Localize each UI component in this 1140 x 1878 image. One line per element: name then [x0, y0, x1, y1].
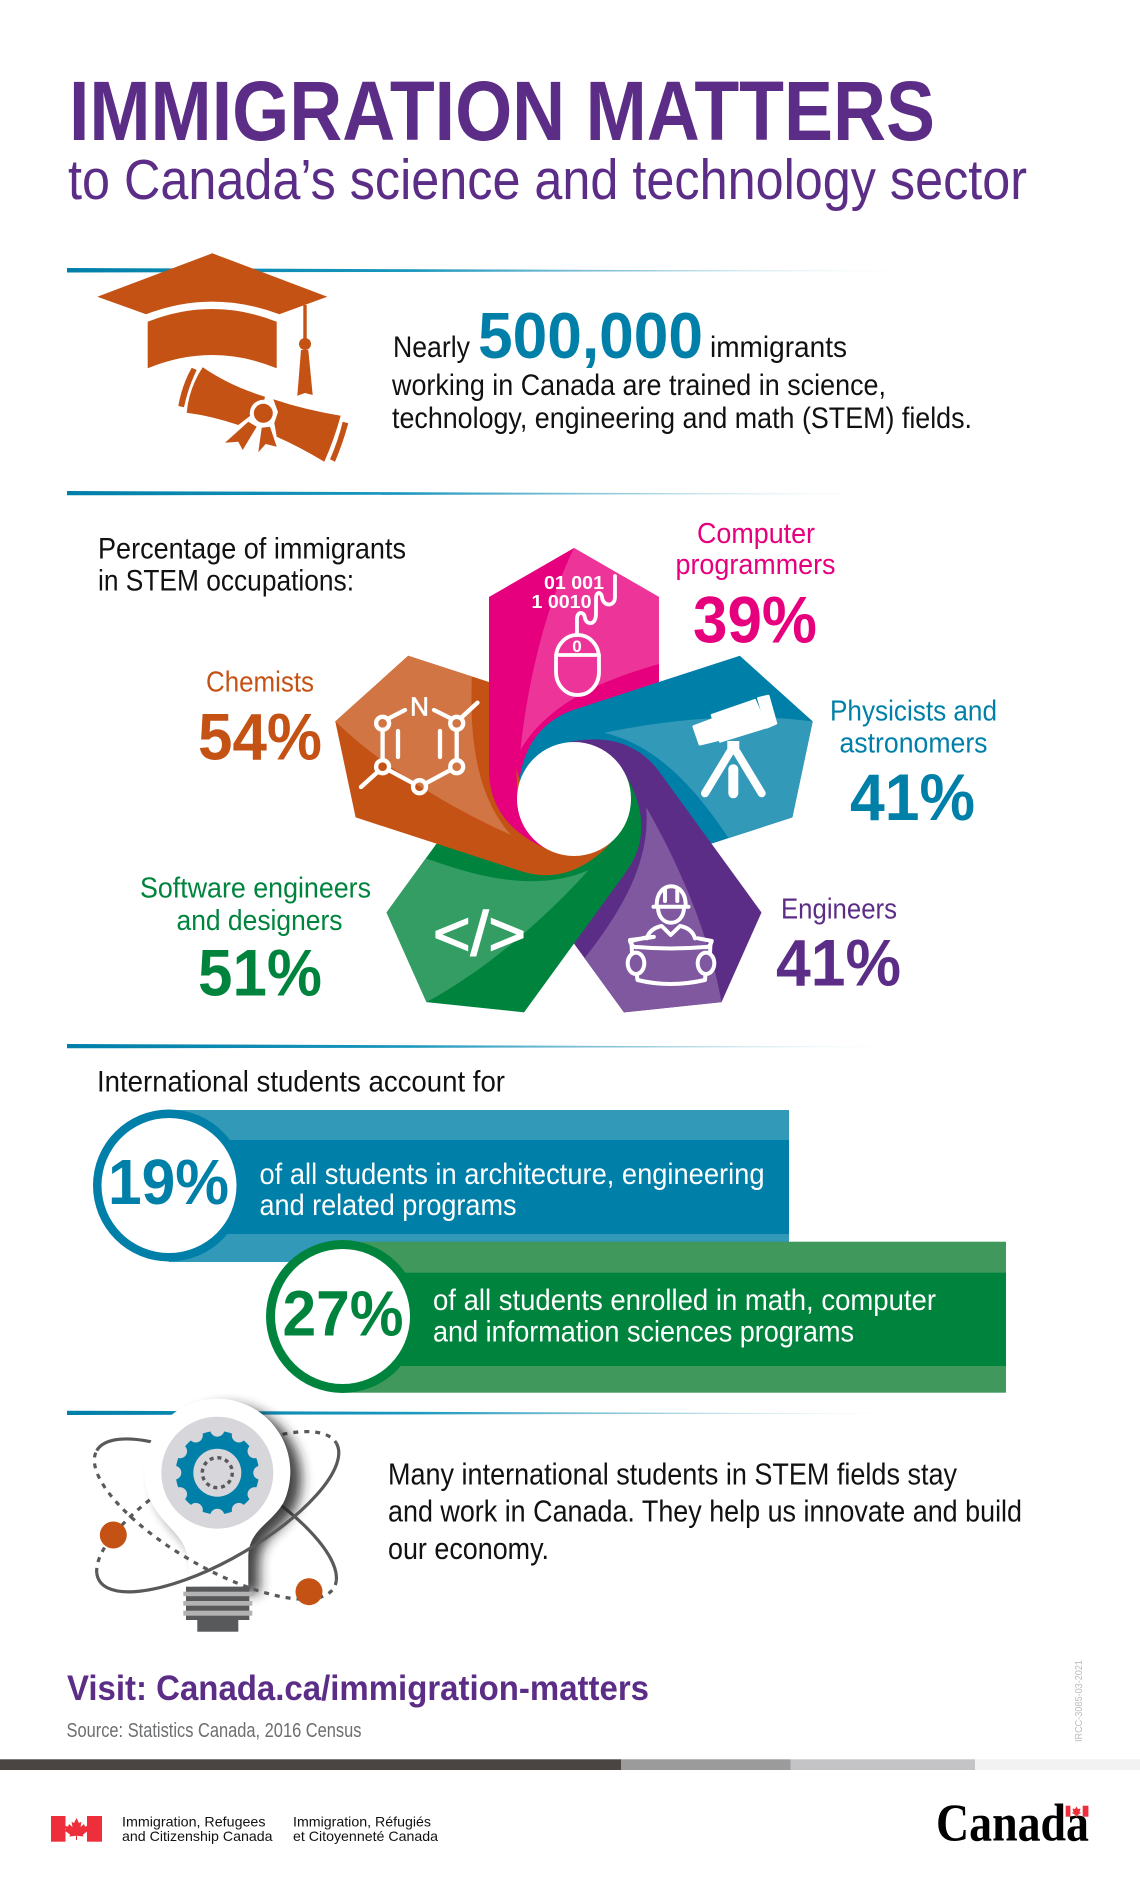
label: chemists 54%: 54% — [198, 700, 322, 774]
panel: 27% bar: of all students enrolled in math, computer — [433, 1284, 936, 1317]
icon: computer mouse with binary code: 1 0010 — [532, 591, 592, 612]
heading: percentage of immigrants: Percentage of immigrants — [98, 532, 406, 566]
subtitle: to Canada’s science and technology sector — [68, 148, 1027, 212]
text block: nearly 500,000 immigrants: technology, engineering and math (STEM) fields. — [392, 402, 972, 435]
icon: molecule — [361, 692, 478, 793]
label: computer programmers 39%: programmers — [676, 549, 836, 581]
label: physicists and astronomers 41% — [830, 696, 997, 834]
text block: stay and work in Canada — [388, 1456, 1022, 1566]
panel: 27% bar: 27% — [282, 1278, 404, 1350]
link: visit canada.ca: Visit: Canada.ca/immigration-matters — [67, 1669, 649, 1708]
canada wordmark: Canada — [936, 1794, 1089, 1852]
label: software engineers and designers 51%: Software engineers — [140, 872, 371, 904]
label: physicists and astronomers 41%: astronomers — [840, 728, 988, 760]
label: computer programmers 39%: 39% — [693, 582, 817, 656]
icon: graduation cap and diploma — [97, 253, 348, 462]
label: physicists and astronomers 41%: Physicists and — [830, 696, 997, 728]
icon: engineer with blueprint — [628, 886, 714, 984]
icon: computer mouse with binary code: 0 — [572, 637, 582, 656]
panel: 19% bar — [93, 1110, 789, 1262]
department name french: Immigration, Réfugiés — [293, 1814, 431, 1830]
icon: code brackets: </> — [433, 900, 526, 969]
icon: molecule: N — [410, 692, 429, 722]
petal: computer programmers — [489, 548, 659, 853]
label: software engineers and designers 51%: 51% — [198, 936, 322, 1010]
text block: nearly 500,000 immigrants: 500,000 — [478, 299, 703, 372]
text block: nearly 500,000 immigrants — [391, 299, 972, 435]
text block: nearly 500,000 immigrants: Nearly — [393, 331, 470, 364]
icon: computer mouse with binary code: 01 001 — [544, 572, 604, 593]
panel: 27% bar: and information sciences programs — [433, 1316, 854, 1348]
label: engineers 41% — [776, 894, 901, 1000]
chart: five-petal swirl of occupations — [309, 548, 839, 1052]
panel: 27% bar — [266, 1240, 1006, 1393]
label: engineers 41%: Engineers — [781, 894, 897, 926]
text block: stay and work in Canada: and work in Canada. They help us innovate and build — [388, 1494, 1022, 1528]
department name english: and Citizenship Canada — [122, 1828, 273, 1844]
label: physicists and astronomers 41%: 41% — [850, 760, 975, 834]
department name french: et Citoyenneté Canada — [293, 1828, 438, 1844]
panel: 19% bar: 19% — [108, 1146, 229, 1218]
petal: engineers — [473, 705, 790, 1052]
label: computer programmers 39%: Computer — [697, 518, 815, 550]
text block: nearly 500,000 immigrants: working in Canada are trained in science, — [391, 369, 886, 402]
icon: computer mouse with binary code — [532, 572, 615, 695]
label: chemists 54%: Chemists — [206, 666, 314, 698]
department name english — [122, 1814, 273, 1844]
label: chemists 54% — [198, 666, 322, 774]
petal: physicists and astronomers — [496, 641, 839, 897]
icon: light bulb with gear and orbits — [73, 1399, 360, 1632]
title: IMMIGRATION MATTERS — [69, 64, 935, 158]
panel: 19% bar: of all students in architecture, engineering — [260, 1158, 764, 1191]
text block: stay and work in Canada: Many international students in STEM fields stay — [388, 1456, 957, 1492]
icon: canadian flag — [51, 1816, 102, 1842]
petal: software engineers — [358, 705, 675, 1052]
document code: IRCC-3085-03-2021 — [1073, 1660, 1085, 1742]
label: software engineers and designers 51%: and designers — [176, 905, 342, 937]
text block: nearly 500,000 immigrants: immigrants — [710, 331, 847, 364]
footer colour bar — [0, 1759, 1140, 1770]
department name french — [293, 1814, 438, 1844]
text block: stay and work in Canada: our economy. — [388, 1531, 549, 1566]
heading: percentage of immigrants: in STEM occupations: — [98, 564, 354, 598]
heading: international students: International students account for — [97, 1066, 505, 1098]
label: computer programmers 39% — [676, 518, 836, 656]
department name english: Immigration, Refugees — [122, 1814, 266, 1830]
label: software engineers and designers 51% — [140, 872, 371, 1010]
panel: 19% bar: and related programs — [260, 1189, 516, 1222]
icon: telescope — [694, 696, 776, 793]
heading: percentage of immigrants — [98, 532, 406, 598]
label: engineers 41%: 41% — [776, 926, 901, 1000]
petal: chemists — [309, 641, 652, 897]
source note: Source: Statistics Canada, 2016 Census — [66, 1720, 362, 1742]
